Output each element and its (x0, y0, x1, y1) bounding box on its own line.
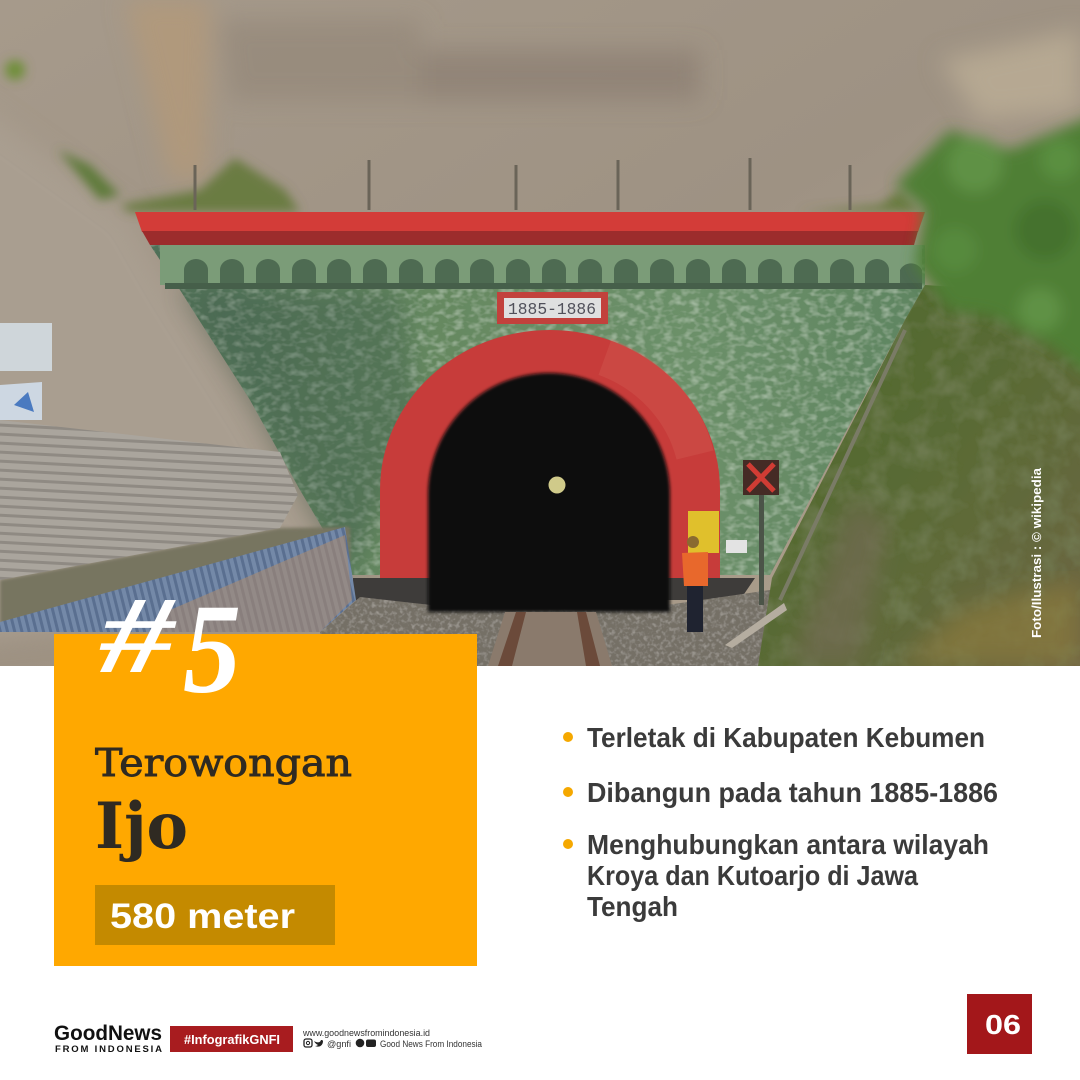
facts list (563, 722, 998, 922)
ground strip beside fence (0, 527, 350, 625)
marker 1640 (726, 540, 747, 553)
fact: connection (563, 829, 989, 922)
plaque 1885-1886: 1885-1886 (508, 301, 596, 320)
social links: Good News From Indonesia (380, 1039, 482, 1049)
base blocks (353, 578, 755, 608)
rank number: 5 (183, 578, 241, 720)
wooden plank (725, 603, 787, 648)
railway tracks (488, 612, 612, 666)
fact: connection: Menghubungkan antara wilayah (587, 829, 989, 860)
cornice band with arches (160, 245, 922, 289)
fence posts (195, 158, 850, 210)
fact: location: Terletak di Kabupaten Kebumen (587, 722, 985, 753)
red brick arch (380, 330, 720, 578)
panel: title card (54, 574, 477, 966)
red cornice (135, 212, 925, 245)
left slope (0, 100, 350, 640)
footer logo (54, 1022, 162, 1055)
worker (682, 536, 708, 632)
tunnel opening (428, 373, 670, 612)
blue corrugated fence (0, 527, 356, 632)
signs on left slope (0, 323, 52, 420)
hashtag badge: #InfografikGNFI (184, 1033, 280, 1047)
heading: Ijo: Ijo (95, 789, 188, 864)
panel: tunnel photo (0, 0, 1080, 666)
footer logo: GoodNews (54, 1022, 162, 1045)
stone wall (150, 245, 925, 575)
photo credit: Foto/Ilustrasi : © wikipedia (1030, 467, 1044, 638)
heading: Terowongan: Terowongan (95, 741, 352, 785)
foliage (895, 105, 1080, 400)
length badge: 580 meter (110, 897, 295, 936)
light at tunnel end (548, 476, 566, 494)
rank number: # (99, 574, 177, 696)
social links: @gnfi (327, 1039, 351, 1049)
social links (302, 1028, 482, 1049)
plaque 1885-1886 (497, 292, 608, 324)
white lower section (0, 666, 1080, 1080)
footer logo: FROM INDONESIA (55, 1044, 162, 1055)
fact: connection: Kroya dan Kutoarjo di Jawa (587, 860, 919, 891)
fact: connection: Tengah (587, 891, 678, 922)
fact: built: Dibangun pada tahun 1885-1886 (587, 777, 998, 808)
rank number (99, 574, 241, 720)
length badge (95, 885, 335, 945)
ground (320, 590, 790, 666)
vegetation along the top of the wall (5, 60, 920, 212)
right hill with vegetation (758, 285, 1080, 666)
corrugated fence (0, 420, 298, 580)
warning sign (743, 460, 779, 605)
hashtag badge (170, 1026, 293, 1052)
yellow notice (688, 511, 719, 553)
page number (967, 994, 1032, 1054)
page number: 06 (985, 1009, 1021, 1040)
social links: www.goodnewsfromindonesia.id (302, 1028, 430, 1038)
